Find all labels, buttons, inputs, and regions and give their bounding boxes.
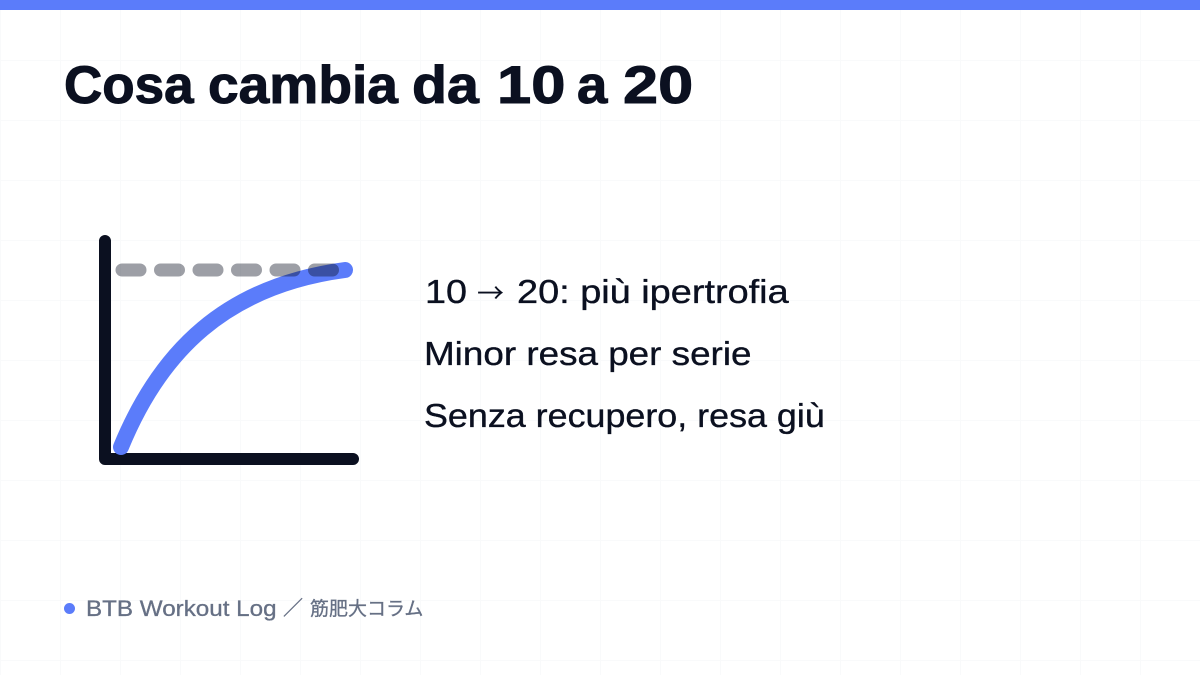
point 1: →: [477, 272, 504, 311]
point 1: 20: più ipertrofia: [517, 273, 789, 310]
footer text: 筋肥大コラム: [310, 599, 423, 620]
title: a: [577, 56, 607, 115]
title: cambia: [208, 56, 398, 115]
dashed plateau line: [122, 264, 340, 276]
title: [64, 56, 693, 115]
title: 20: [623, 56, 693, 115]
chart axes: [105, 241, 353, 459]
blue growth curve: [121, 270, 345, 447]
point 1: 10: [425, 273, 467, 310]
top accent bar: [0, 0, 1200, 10]
point 3: Senza recupero, resa giù: [424, 397, 825, 434]
title: Cosa: [64, 56, 194, 115]
footer: source label: [64, 596, 423, 621]
point 2: Minor resa per serie: [424, 335, 751, 372]
footer text: ／: [283, 598, 303, 620]
footer bullet: [64, 603, 75, 614]
title: 10: [496, 56, 565, 115]
footer text: [86, 596, 423, 621]
footer text: BTB Workout Log: [86, 596, 277, 621]
title: da: [412, 56, 479, 115]
text block: key points: [424, 272, 825, 434]
